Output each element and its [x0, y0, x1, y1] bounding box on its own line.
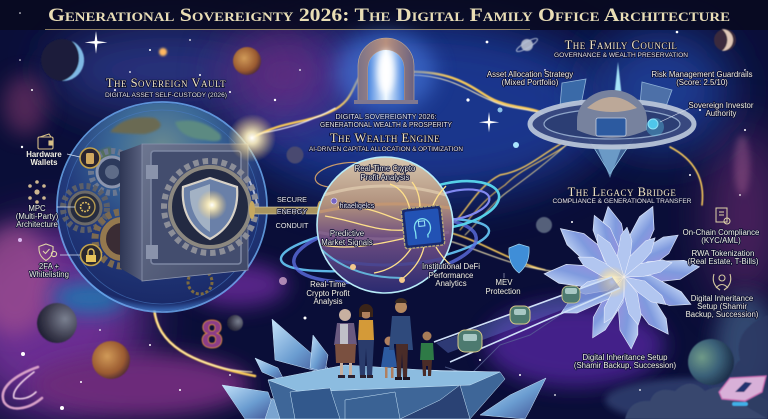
icon: network cluster — [28, 180, 46, 204]
girl — [381, 336, 397, 378]
heading: the wealth engine: The Wealth Engine — [330, 131, 440, 145]
engine labels: Crypto Profit — [306, 289, 350, 298]
heading: the wealth engine — [309, 131, 463, 153]
energy conduit: SECURE — [277, 195, 307, 204]
engine labels: Predictive — [330, 229, 364, 238]
MEV shield icon and label: Protection — [485, 287, 521, 296]
council labels: Asset Allocation Strategy — [487, 70, 573, 79]
mother — [358, 304, 374, 378]
central heading: digital sovereignty — [320, 112, 452, 129]
central heading: digital sovereignty: GENERATIONAL WEALTH & PROSPERITY — [320, 120, 452, 129]
engine labels: Analysis — [313, 297, 343, 306]
portal arch — [336, 32, 436, 112]
vault planet — [57, 102, 267, 312]
vault safe — [120, 144, 256, 281]
feature labels: vault: MPC — [28, 204, 46, 213]
feature labels: vault: Hardware — [26, 150, 62, 159]
grandmother — [334, 309, 357, 378]
compliance icons and labels: Digital Inheritance — [691, 294, 753, 303]
title: Generational Sovereignty 2026: The Digital Family Office Architecture — [48, 5, 730, 26]
feature labels: vault: Architecture — [16, 220, 58, 229]
icon: wallet — [38, 134, 53, 149]
compliance icons and labels: (KYC/AML) — [701, 236, 741, 245]
feature labels: vault: Wallets — [30, 158, 58, 167]
MEV shield icon and label — [485, 244, 529, 296]
wealth engine planet — [317, 157, 456, 293]
council labels: Risk Management Guardrails — [652, 70, 753, 79]
heading: the legacy bridge — [552, 185, 692, 205]
gold energy streams — [154, 72, 703, 376]
compliance icons and labels — [683, 208, 759, 319]
council labels: Authority — [706, 109, 736, 118]
council labels: (Mixed Portfolio) — [502, 78, 559, 87]
feature labels: vault: (Multi-Party) — [16, 212, 59, 221]
heading: the legacy bridge: COMPLIANCE & GENERATIONAL TRANSFER — [552, 198, 692, 205]
feature icons on vault — [28, 134, 102, 266]
shield — [183, 178, 237, 239]
MEV shield icon and label: MEV — [496, 278, 513, 287]
icon: document check — [716, 208, 730, 224]
heading: the family council — [554, 38, 688, 59]
crystal platform — [222, 319, 546, 419]
compliance icons and labels: (Real Estate, T-Bills) — [688, 257, 759, 266]
family council ship — [530, 62, 694, 178]
bridge caption: (Shamir Backup, Succession) — [574, 361, 677, 370]
glitch glyph: 8 — [201, 314, 223, 356]
engine labels: Analytics — [435, 279, 467, 288]
boy — [420, 332, 434, 376]
bridge caption: Digital Inheritance Setup — [583, 353, 668, 362]
AI chip — [401, 205, 445, 249]
family figures — [334, 298, 434, 380]
feature labels: vault: Whitelisting — [29, 270, 69, 279]
icon: MPC node — [75, 197, 95, 217]
logo bottom-left — [3, 367, 42, 408]
heading: the family council: The Family Council — [565, 38, 677, 52]
compliance icons and labels: RWA Tokenization — [692, 249, 754, 258]
icon: people in laurels — [713, 274, 731, 290]
heading: the sovereign vault — [105, 76, 227, 99]
engine labels: Real-Time Crypto — [355, 164, 416, 173]
gear ring door — [164, 161, 256, 253]
compliance icons and labels: Backup, Succession) — [686, 310, 759, 319]
icon: shield check — [39, 244, 57, 260]
vault gears — [63, 151, 212, 294]
engine labels — [306, 164, 480, 306]
heading: the sovereign vault: The Sovereign Vault — [106, 76, 226, 90]
energy conduit: ENERGY — [277, 207, 307, 216]
energy conduit: CONDUIT — [276, 221, 309, 230]
crystal flower — [544, 202, 701, 350]
bridge caption — [574, 353, 677, 370]
feature labels: vault — [16, 150, 69, 279]
heading: the wealth engine: AI-DRIVEN CAPITAL ALLOCATION & OPTIMIZATION — [309, 146, 463, 153]
heading: the sovereign vault: DIGITAL ASSET SELF-CUSTODY (2026) — [105, 92, 227, 99]
father — [389, 298, 413, 380]
engine labels: Institutional DeFi — [422, 262, 480, 271]
vault burst — [228, 114, 276, 162]
icon: hardware wallet node — [80, 148, 100, 168]
planet land masses — [85, 117, 221, 165]
engine labels: Performance — [429, 271, 473, 280]
council labels: Sovereign Investor — [688, 101, 754, 110]
wealth engine rings back — [278, 159, 503, 293]
energy conduit — [249, 195, 323, 230]
feature labels: vault: 2FA + — [39, 262, 60, 271]
engine labels: hitaeligelcs — [340, 203, 375, 210]
heading: the legacy bridge: The Legacy Bridge — [568, 185, 676, 199]
engine labels: Real-Time — [310, 280, 346, 289]
council labels: (Score: 2.5/10) — [676, 78, 728, 87]
circuit traces — [322, 182, 456, 279]
heading: the family council: GOVERNANCE & WEALTH PRESERVATION — [554, 52, 688, 59]
icon: padlock node — [80, 244, 102, 266]
central heading: digital sovereignty: DIGITAL SOVEREIGNTY 2026: — [336, 112, 436, 121]
legacy bridge with pods — [434, 277, 620, 375]
side screens — [560, 79, 672, 112]
council labels — [487, 70, 754, 118]
logo bottom-right — [719, 376, 766, 406]
compliance icons and labels: Setup (Shamir — [697, 302, 747, 311]
compliance icons and labels: On-Chain Compliance — [683, 228, 759, 237]
engine labels: Profit Analysis — [361, 173, 410, 182]
engine labels: Market Signals — [321, 238, 373, 247]
